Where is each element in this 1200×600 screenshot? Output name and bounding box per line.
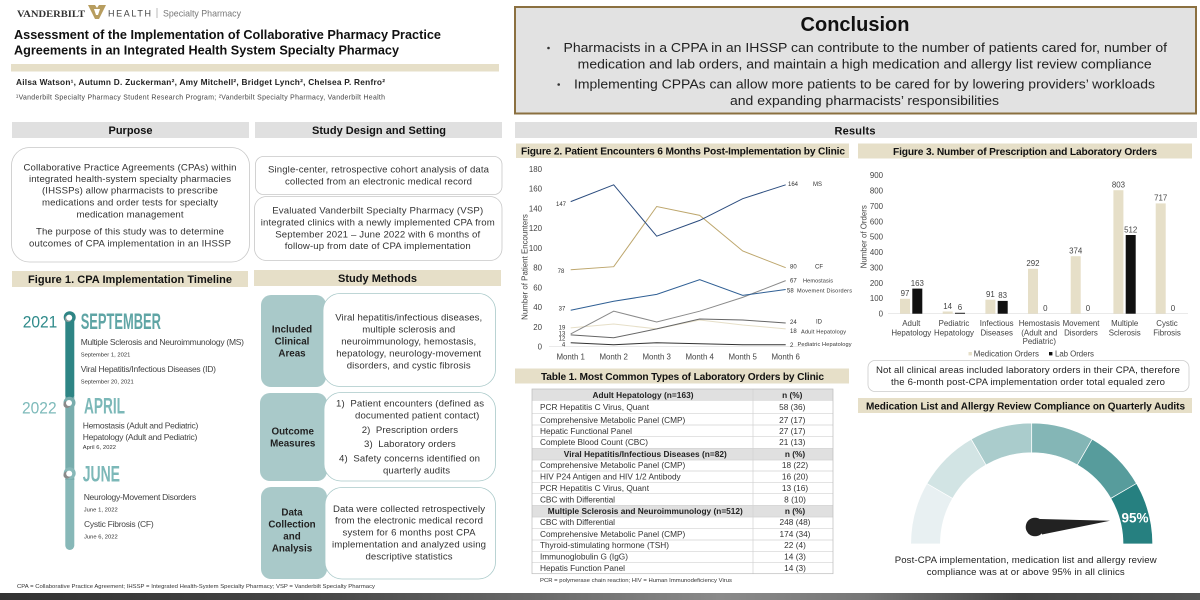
panel: figure 1 timeline bbox=[12, 271, 248, 550]
heading: study design: Study Design and Setting bbox=[312, 125, 446, 137]
category labels: Fibrosis bbox=[1153, 328, 1181, 338]
september entries: Viral Hepatitis/Infectious Diseases (ID) bbox=[81, 364, 216, 374]
table section: multiple sclerosis: 14 (3) bbox=[784, 552, 806, 562]
september entries: September 1, 2021 bbox=[81, 353, 130, 359]
affiliations: ¹Vanderbilt Specialty Pharmacy Student Research Program; ²Vanderbilt Specialty Pharmacy, Vanderbilt Health bbox=[16, 94, 385, 102]
study design box 2: integrated clinics with a newly implemented CPA from bbox=[261, 218, 495, 229]
x axis: Month 1 bbox=[556, 352, 585, 362]
study design box 2: Evaluated Vanderbilt Specialty Pharmacy (VSP) bbox=[272, 206, 483, 217]
table section: viral hepatitis: Comprehensive Metabolic Panel (CMP) bbox=[540, 460, 686, 470]
gauge caption: Post-CPA implementation, medication list and allergy review bbox=[895, 555, 1157, 566]
table section: adult hepatology: Complete Blood Count (CBC) bbox=[540, 437, 648, 447]
conclusion bullet 2 bbox=[557, 76, 1155, 108]
method row: outcome measures: 2) Prescription orders bbox=[362, 425, 458, 436]
end value and series labels: 2 bbox=[790, 343, 794, 349]
2021 year label: 2021 bbox=[23, 313, 57, 332]
category labels: Pediatric bbox=[939, 319, 969, 328]
table section: adult hepatology: n (%) bbox=[782, 390, 803, 400]
series: adult hepatology bbox=[571, 320, 786, 329]
table section: viral hepatitis: Viral Hepatitis/Infectious Diseases (n=82) bbox=[564, 449, 727, 459]
study design box 1 bbox=[256, 156, 502, 194]
category labels: Diseases bbox=[980, 328, 1013, 338]
table section: adult hepatology: 21 (13) bbox=[779, 437, 806, 447]
y axis labels: 40 bbox=[533, 303, 543, 312]
september entries: SEPTEMBER bbox=[81, 309, 161, 334]
x axis: Month 4 bbox=[685, 352, 715, 362]
x axis: Month 5 bbox=[728, 352, 758, 362]
april entries: April 6, 2022 bbox=[83, 445, 116, 451]
heading: study methods: Study Methods bbox=[338, 273, 417, 285]
bar value labels: 717 bbox=[1154, 194, 1167, 203]
title bbox=[14, 27, 441, 58]
method row: data collection and analysis: Collection bbox=[268, 520, 316, 530]
conclusion bullet 1: Pharmacists in a CPPA in an IHSSP can contribute to the number of patients cared for, number of bbox=[564, 40, 1167, 55]
method row: included clinical areas: Included bbox=[272, 324, 312, 336]
heading: figure 2: Figure 2. Patient Encounters 6 Months Post-Implementation by Clinic bbox=[521, 146, 845, 157]
table section: multiple sclerosis: 248 (48) bbox=[780, 517, 811, 527]
table section: multiple sclerosis: 22 (4) bbox=[784, 540, 806, 550]
purpose text box: The purpose of this study was to determine bbox=[36, 226, 224, 237]
y axis labels: 100 bbox=[529, 244, 543, 253]
heading: compliance: Medication List and Allergy Review Compliance on Quarterly Audits bbox=[866, 401, 1185, 412]
april entries: Hemostasis (Adult and Pediatric) bbox=[83, 420, 198, 430]
category labels: Adult bbox=[902, 319, 921, 328]
logo: Vanderbilt Health Specialty Pharmacy bbox=[17, 5, 241, 20]
method row: included clinical areas bbox=[261, 294, 496, 387]
title: Assessment of the Implementation of Collaborative Pharmacy Practice bbox=[14, 27, 441, 42]
purpose text box: outcomes of CPA implementation in an IHSSP bbox=[29, 239, 231, 250]
bars: medication orders bbox=[900, 190, 1166, 314]
table section: adult hepatology: Hepatic Functional Panel bbox=[540, 426, 632, 436]
table section: viral hepatitis: 18 (22) bbox=[782, 460, 808, 470]
y axis labels: 800 bbox=[870, 187, 884, 196]
method row: outcome measures: 1) Patient encounters (defined as bbox=[336, 399, 484, 410]
heading: purpose bbox=[12, 122, 249, 138]
abbreviations footnote: CPA = Collaborative Practice Agreement; IHSSP = Integrated Health-System Specialty Pharmacy; VSP = Vanderbilt Specialty Pharmacy bbox=[17, 584, 375, 590]
gauge value: 95% bbox=[1121, 510, 1149, 526]
bar value labels: 14 bbox=[943, 302, 953, 311]
table section: multiple sclerosis: 14 (3) bbox=[784, 563, 806, 573]
heading: conclusion: Conclusion bbox=[801, 14, 909, 36]
y axis labels: 700 bbox=[870, 202, 884, 211]
start value labels: 4 bbox=[562, 342, 566, 348]
heading: figure 1 bbox=[12, 271, 248, 287]
table section: viral hepatitis: 16 (20) bbox=[782, 472, 808, 482]
june entries: JUNE bbox=[83, 462, 120, 487]
table section: adult hepatology: 27 (17) bbox=[779, 415, 806, 425]
start value labels: 12 bbox=[559, 336, 566, 342]
table section: multiple sclerosis: n (%) bbox=[785, 506, 805, 516]
end value and series labels: 67 bbox=[790, 278, 797, 284]
panel: figure 2 line chart bbox=[516, 144, 852, 362]
category labels: Cystic bbox=[1156, 319, 1178, 328]
method row: data collection and analysis: Analysis bbox=[272, 544, 313, 554]
logo: Vanderbilt Health Specialty Pharmacy: HEALTH bbox=[108, 8, 151, 18]
method row: included clinical areas: hepatology, neurology-movement bbox=[336, 349, 482, 360]
end value and series labels: Adult Hepatology bbox=[801, 330, 846, 336]
title: Agreements in an Integrated Health System Specialty Pharmacy bbox=[14, 42, 400, 58]
y axis labels: 900 bbox=[870, 171, 884, 180]
september entries: September 20, 2021 bbox=[81, 379, 134, 385]
september entries bbox=[81, 309, 244, 385]
end value and series labels: 18 bbox=[790, 329, 797, 335]
september entries: Multiple Sclerosis and Neuroimmunology (MS) bbox=[81, 337, 244, 347]
series: CF bbox=[571, 206, 786, 270]
end value and series labels: Hemostasis bbox=[803, 278, 833, 284]
table section: adult hepatology: 27 (17) bbox=[779, 426, 806, 436]
method row: data collection and analysis: descriptive statistics bbox=[366, 551, 453, 562]
table section: multiple sclerosis: 174 (34) bbox=[780, 529, 811, 539]
june entries bbox=[83, 462, 196, 540]
heading: study design bbox=[255, 122, 502, 138]
note box: Not all clinical areas included laboratory orders in their CPA, therefore bbox=[876, 365, 1180, 376]
x axis bbox=[549, 347, 807, 362]
y axis labels: 200 bbox=[870, 279, 884, 288]
conclusion bullet 2: Implementing CPPAs can allow more patients to be cared for by lowering providers’ workloads bbox=[574, 76, 1155, 92]
y axis labels: 60 bbox=[533, 283, 543, 292]
table section: viral hepatitis: 8 (10) bbox=[784, 494, 806, 504]
end value and series labels: 58 bbox=[787, 288, 794, 294]
bar value labels: 6 bbox=[958, 303, 963, 312]
table footnote: PCR = polymerase chain reaction; HIV = Human Immunodeficiency Virus bbox=[540, 578, 732, 584]
table section: adult hepatology: 58 (36) bbox=[779, 402, 806, 412]
legend bbox=[968, 350, 1094, 358]
method row: included clinical areas: neuroimmunology, hemostasis, bbox=[341, 337, 476, 348]
table section: multiple sclerosis: Thyroid-stimulating hormone (TSH) bbox=[540, 540, 669, 550]
end value and series labels: Movement Disorders bbox=[797, 288, 852, 294]
end value and series labels: CF bbox=[815, 264, 823, 270]
category labels: Infectious bbox=[980, 319, 1014, 328]
legend: Medication Orders bbox=[974, 350, 1039, 358]
y axis labels: 120 bbox=[529, 224, 543, 233]
note box bbox=[868, 360, 1189, 392]
panel: study methods bbox=[254, 270, 501, 579]
purpose text box: medication management bbox=[76, 209, 184, 220]
bar value labels: 83 bbox=[998, 291, 1008, 300]
gauge caption: compliance was at or above 95% in all clinics bbox=[927, 567, 1125, 578]
bar value labels: 91 bbox=[986, 290, 995, 299]
timeline bar bbox=[63, 311, 76, 550]
end value and series labels bbox=[787, 182, 852, 349]
y axis labels: 500 bbox=[870, 233, 884, 242]
y axis labels: 180 bbox=[529, 165, 543, 174]
method row: outcome measures: Outcome bbox=[271, 426, 314, 438]
table section: multiple sclerosis: Hepatis Function Panel bbox=[540, 563, 625, 573]
table section: adult hepatology: Comprehensive Metabolic Panel (CMP) bbox=[540, 415, 686, 425]
method row: data collection and analysis: implementation and analyzed using bbox=[332, 540, 486, 551]
april entries: Hepatology (Adult and Pediatric) bbox=[83, 432, 198, 442]
bar value labels: 0 bbox=[1086, 304, 1091, 313]
table section: adult hepatology bbox=[540, 390, 806, 447]
series: MS bbox=[571, 185, 786, 236]
category labels: Sclerosis bbox=[1109, 328, 1141, 338]
june entries: Cystic Fibrosis (CF) bbox=[84, 519, 154, 529]
method row: outcome measures: documented patient contact) bbox=[355, 411, 479, 422]
method row: included clinical areas: Areas bbox=[278, 348, 306, 360]
method row: data collection and analysis: and bbox=[283, 532, 301, 542]
y axis labels: 600 bbox=[870, 217, 884, 226]
y axis labels: Number of Patient Encounters bbox=[520, 214, 530, 320]
study design box 2: September 2021 – June 2022 with 6 months of bbox=[275, 229, 481, 240]
category labels: Hemostasis bbox=[1019, 319, 1060, 328]
method row: data collection and analysis: Data were collected retrospectively bbox=[333, 504, 485, 515]
bar value labels: 163 bbox=[911, 279, 924, 288]
table section: multiple sclerosis: Comprehensive Metabolic Panel (CMP) bbox=[540, 529, 686, 539]
april entries: APRIL bbox=[84, 393, 125, 418]
method row: included clinical areas: disorders, and cystic fibrosis bbox=[347, 361, 471, 372]
start value labels bbox=[556, 202, 567, 348]
gauge segments bbox=[911, 423, 1153, 544]
table section: viral hepatitis bbox=[540, 449, 808, 504]
category labels: Disorders bbox=[1064, 328, 1098, 338]
2022 year label: 2022 bbox=[22, 399, 57, 418]
purpose text box: medications and order tests for specialty bbox=[42, 197, 218, 208]
panel: figure 3 bar chart bbox=[858, 144, 1192, 392]
heading: table 1 bbox=[515, 368, 849, 384]
study design box 2: follow-up from date of CPA implementation bbox=[285, 241, 471, 252]
y axis labels: 300 bbox=[870, 264, 884, 272]
table section: adult hepatology: PCR Hepatitis C Virus, Quant bbox=[540, 402, 650, 412]
bar value labels: 374 bbox=[1069, 246, 1083, 256]
start value labels: 78 bbox=[558, 269, 565, 275]
table grid bbox=[532, 389, 833, 574]
panel: conclusion bbox=[515, 7, 1196, 114]
category labels: (Adult and bbox=[1021, 328, 1057, 338]
purpose text box: (IHSSPs) allow pharmacists to prescribe bbox=[42, 186, 218, 197]
category labels: Hepatology bbox=[934, 328, 974, 338]
method row: data collection and analysis: from the electronic medical record bbox=[335, 516, 483, 527]
conclusion bullet 2: and expanding pharmacists’ responsibilities bbox=[730, 93, 999, 108]
logo: Vanderbilt Health Specialty Pharmacy: Specialty Pharmacy bbox=[163, 8, 241, 18]
study design box 1: collected from an electronic medical record bbox=[285, 177, 472, 188]
y axis labels bbox=[860, 171, 1188, 319]
method row: outcome measures: 4) Safety concerns identified on bbox=[339, 453, 480, 464]
table section: multiple sclerosis: CBC with Differential bbox=[540, 517, 615, 527]
panel: study design and setting bbox=[254, 122, 502, 260]
study design box 1: Single-center, retrospective cohort analysis of data bbox=[268, 165, 490, 176]
table section: viral hepatitis: 13 (16) bbox=[782, 483, 808, 493]
footer bar bbox=[0, 593, 1200, 600]
conclusion bullet 1: medication and lab orders, and maintain a high medication and allergy list review compliance bbox=[578, 56, 1152, 72]
y axis labels: 0 bbox=[879, 310, 884, 319]
series: movement disorders bbox=[571, 280, 786, 310]
table section: multiple sclerosis: Multiple Sclerosis and Neuroimmunology (n=512) bbox=[548, 506, 743, 516]
panel: compliance gauge bbox=[858, 398, 1192, 578]
method row: data collection and analysis: system for 6 months post CPA bbox=[342, 528, 476, 539]
y axis labels: 400 bbox=[870, 248, 884, 257]
heading: table 1: Table 1. Most Common Types of Laboratory Orders by Clinic bbox=[541, 372, 824, 383]
logo: Vanderbilt Health Specialty Pharmacy: VANDERBILT bbox=[17, 10, 86, 20]
bars: lab orders bbox=[912, 235, 1136, 314]
start value labels: 13 bbox=[559, 332, 566, 338]
bar value labels: 512 bbox=[1124, 225, 1137, 234]
method row: outcome measures: quarterly audits bbox=[383, 465, 450, 476]
heading: figure 1: Figure 1. CPA Implementation Timeline bbox=[28, 274, 232, 286]
series: ID bbox=[571, 319, 786, 338]
bar value labels: 0 bbox=[1043, 304, 1048, 313]
table section: viral hepatitis: n (%) bbox=[785, 449, 805, 459]
purpose text box: integrated health-system specialty pharmacies bbox=[29, 174, 231, 185]
bar value labels: 803 bbox=[1112, 180, 1126, 190]
bar value labels: 0 bbox=[1171, 304, 1176, 313]
table section: viral hepatitis: PCR Hepatitis C Virus, Quant bbox=[540, 483, 650, 493]
purpose text box bbox=[12, 148, 250, 262]
category labels: Movement bbox=[1063, 319, 1100, 328]
heading: figure 3: Figure 3. Number of Prescription and Laboratory Orders bbox=[893, 147, 1157, 158]
heading: results: Results bbox=[834, 126, 876, 138]
method row: outcome measures bbox=[260, 392, 496, 481]
bar value labels bbox=[901, 180, 1176, 313]
panel: purpose bbox=[12, 122, 250, 262]
note box: the 6-month post-CPA implementation order total equaled zero bbox=[891, 377, 1165, 388]
conclusion bullet 1 bbox=[547, 40, 1167, 72]
method row: outcome measures: 3) Laboratory orders bbox=[364, 439, 456, 450]
gauge caption bbox=[895, 555, 1157, 578]
method row: data collection and analysis: Data bbox=[281, 508, 303, 518]
end value and series labels: 24 bbox=[790, 320, 797, 326]
legend: Lab Orders bbox=[1055, 350, 1094, 358]
y axis labels: 20 bbox=[533, 323, 543, 332]
x axis: Month 2 bbox=[599, 352, 628, 362]
start value labels: 37 bbox=[559, 306, 566, 312]
june entries: June 1, 2022 bbox=[84, 508, 118, 514]
panel: table 1 bbox=[515, 368, 849, 584]
method row: included clinical areas: Viral hepatitis/infectious diseases, bbox=[335, 313, 482, 324]
method row: included clinical areas: Clinical bbox=[275, 336, 310, 348]
series: pediatric hepatology bbox=[571, 343, 786, 345]
authors: Ailsa Watson¹, Autumn D. Zuckerman², Amy Mitchell², Bridget Lynch², Chelsea P. Renfro² bbox=[16, 77, 385, 87]
june entries: June 6, 2022 bbox=[84, 534, 118, 540]
y axis labels: 140 bbox=[529, 204, 543, 214]
y axis labels bbox=[520, 165, 543, 352]
series: hemostasis bbox=[571, 281, 786, 334]
june entries: Neurology-Movement Disorders bbox=[84, 492, 196, 502]
method row: data collection and analysis bbox=[261, 487, 496, 579]
bar value labels: 97 bbox=[901, 289, 909, 298]
start value labels: 19 bbox=[559, 326, 566, 332]
heading: study methods bbox=[254, 270, 501, 286]
end value and series labels: MS bbox=[813, 182, 822, 188]
y axis labels: 160 bbox=[529, 185, 543, 194]
heading: purpose: Purpose bbox=[108, 125, 152, 137]
title divider bar bbox=[11, 64, 499, 72]
table section: multiple sclerosis: Immunoglobulin G (IgG) bbox=[540, 552, 628, 562]
end value and series labels: ID bbox=[816, 320, 823, 326]
category labels: Multiple bbox=[1111, 319, 1139, 328]
y axis labels: Number of Orders bbox=[860, 205, 868, 268]
table section: adult hepatology: Adult Hepatology (n=163) bbox=[592, 390, 694, 400]
heading: figure 3 bbox=[858, 144, 1192, 158]
end value and series labels: 164 bbox=[788, 182, 799, 188]
method row: included clinical areas: multiple sclerosis and bbox=[362, 325, 455, 336]
category labels: Hepatology bbox=[891, 328, 931, 338]
x axis: Month 3 bbox=[642, 352, 672, 362]
heading: results bbox=[515, 122, 1197, 138]
y axis labels: 0 bbox=[538, 343, 543, 352]
table section: viral hepatitis: CBC with Differential bbox=[540, 494, 615, 504]
y axis labels: 100 bbox=[870, 294, 884, 303]
end value and series labels: Pediatric Hepatology bbox=[798, 342, 852, 348]
x axis: Month 6 bbox=[771, 352, 801, 362]
category labels: Pediatric) bbox=[1023, 337, 1056, 346]
start value labels: 147 bbox=[556, 202, 567, 208]
y axis labels: 80 bbox=[533, 264, 543, 273]
study design box 2 bbox=[254, 196, 502, 260]
gauge needle bbox=[1026, 518, 1110, 536]
april entries bbox=[83, 393, 198, 451]
category labels bbox=[891, 319, 1181, 346]
end value and series labels: 80 bbox=[790, 264, 797, 270]
bar value labels: 292 bbox=[1026, 259, 1040, 268]
table section: viral hepatitis: HIV P24 Antigen and HIV 1/2 Antibody bbox=[540, 472, 682, 482]
method row: outcome measures: Measures bbox=[270, 438, 316, 450]
purpose text box: Collaborative Practice Agreements (CPAs) within bbox=[24, 162, 236, 173]
table section: multiple sclerosis bbox=[540, 506, 811, 573]
